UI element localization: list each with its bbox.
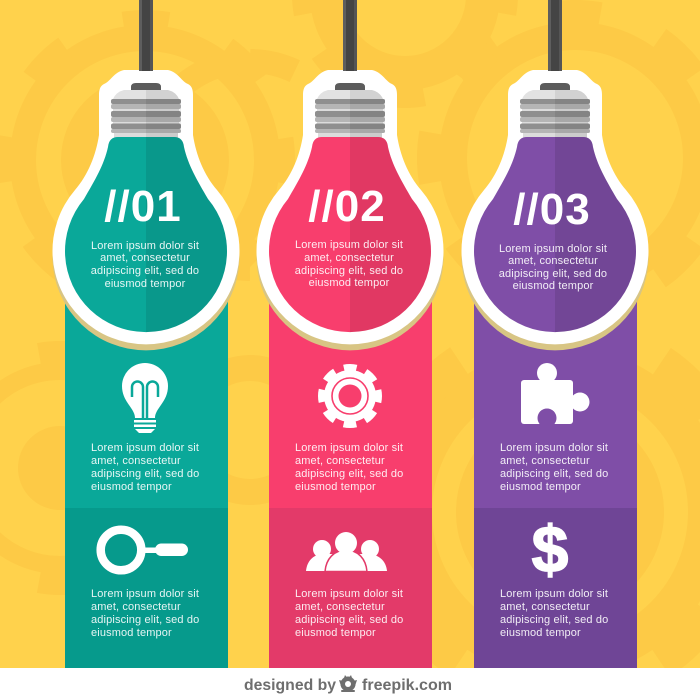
footer credit xyxy=(244,675,452,694)
bulb text 1: Lorem ipsum dolor sit xyxy=(91,240,199,252)
bulb text 1: amet, consectetur xyxy=(100,252,190,264)
light bulb 2 xyxy=(256,0,444,350)
icon: magnifier xyxy=(101,530,188,570)
bulb text 3: amet, consectetur xyxy=(508,255,598,267)
text block pink lower: amet, consectetur xyxy=(295,601,385,613)
strip upper pink xyxy=(269,300,432,508)
number 03: //03 xyxy=(513,185,591,234)
text block pink upper: eiusmod tempor xyxy=(295,481,376,493)
text block teal lower: eiusmod tempor xyxy=(91,627,172,639)
footer credit: designed by xyxy=(244,677,336,694)
text block pink lower: adipiscing elit, sed do xyxy=(295,614,403,626)
bulb text 2: Lorem ipsum dolor sit xyxy=(295,239,403,251)
text block purple upper: amet, consectetur xyxy=(500,455,590,467)
icon: light bulb xyxy=(122,363,168,433)
strip lower purple xyxy=(474,508,637,668)
number 02: //02 xyxy=(308,182,386,231)
number 01: //01 xyxy=(104,182,182,231)
text block purple lower: adipiscing elit, sed do xyxy=(500,614,608,626)
bulb text 3: adipiscing elit, sed do xyxy=(499,268,607,280)
icon: puzzle piece xyxy=(521,363,590,429)
text block purple lower: amet, consectetur xyxy=(500,601,590,613)
text block purple upper: eiusmod tempor xyxy=(500,481,581,493)
bulb text 1: eiusmod tempor xyxy=(105,278,186,290)
text block teal upper: Lorem ipsum dolor sit xyxy=(91,442,199,454)
text block pink upper: amet, consectetur xyxy=(295,455,385,467)
text block purple lower: eiusmod tempor xyxy=(500,627,581,639)
text block pink upper: adipiscing elit, sed do xyxy=(295,468,403,480)
column 2 pink xyxy=(256,0,444,668)
footer credit: freepik.com xyxy=(362,677,452,694)
footer band xyxy=(0,668,700,700)
light bulb 3 xyxy=(462,0,648,350)
light bulb 1 xyxy=(52,0,240,350)
icon: people xyxy=(306,532,387,572)
text block pink upper: Lorem ipsum dolor sit xyxy=(295,442,403,454)
text block pink lower: Lorem ipsum dolor sit xyxy=(295,588,403,600)
strip lower teal xyxy=(65,508,228,668)
icon: gear xyxy=(322,368,378,424)
text block purple lower: Lorem ipsum dolor sit xyxy=(500,588,608,600)
bulb text 2: eiusmod tempor xyxy=(309,277,390,289)
bulb text 2: adipiscing elit, sed do xyxy=(295,265,403,277)
column 3 purple xyxy=(462,0,648,668)
text block purple upper: Lorem ipsum dolor sit xyxy=(500,442,608,454)
text block teal lower: amet, consectetur xyxy=(91,601,181,613)
icon: freepik logo xyxy=(339,675,357,692)
text block teal lower: Lorem ipsum dolor sit xyxy=(91,588,199,600)
text block teal upper: eiusmod tempor xyxy=(91,481,172,493)
bulb text 1: adipiscing elit, sed do xyxy=(91,265,199,277)
bulb text 3: eiusmod tempor xyxy=(513,280,594,292)
strip upper teal xyxy=(65,300,228,508)
text block teal upper: adipiscing elit, sed do xyxy=(91,468,199,480)
icon: dollar sign: $ xyxy=(532,512,568,586)
strip lower pink xyxy=(269,508,432,668)
text block teal upper: amet, consectetur xyxy=(91,455,181,467)
text block purple upper: adipiscing elit, sed do xyxy=(500,468,608,480)
text block pink lower: eiusmod tempor xyxy=(295,627,376,639)
bulb text 3: Lorem ipsum dolor sit xyxy=(499,243,607,255)
text block teal lower: adipiscing elit, sed do xyxy=(91,614,199,626)
bulb text 2: amet, consectetur xyxy=(304,252,394,264)
column 1 teal xyxy=(52,0,240,668)
strip upper purple xyxy=(474,300,637,508)
